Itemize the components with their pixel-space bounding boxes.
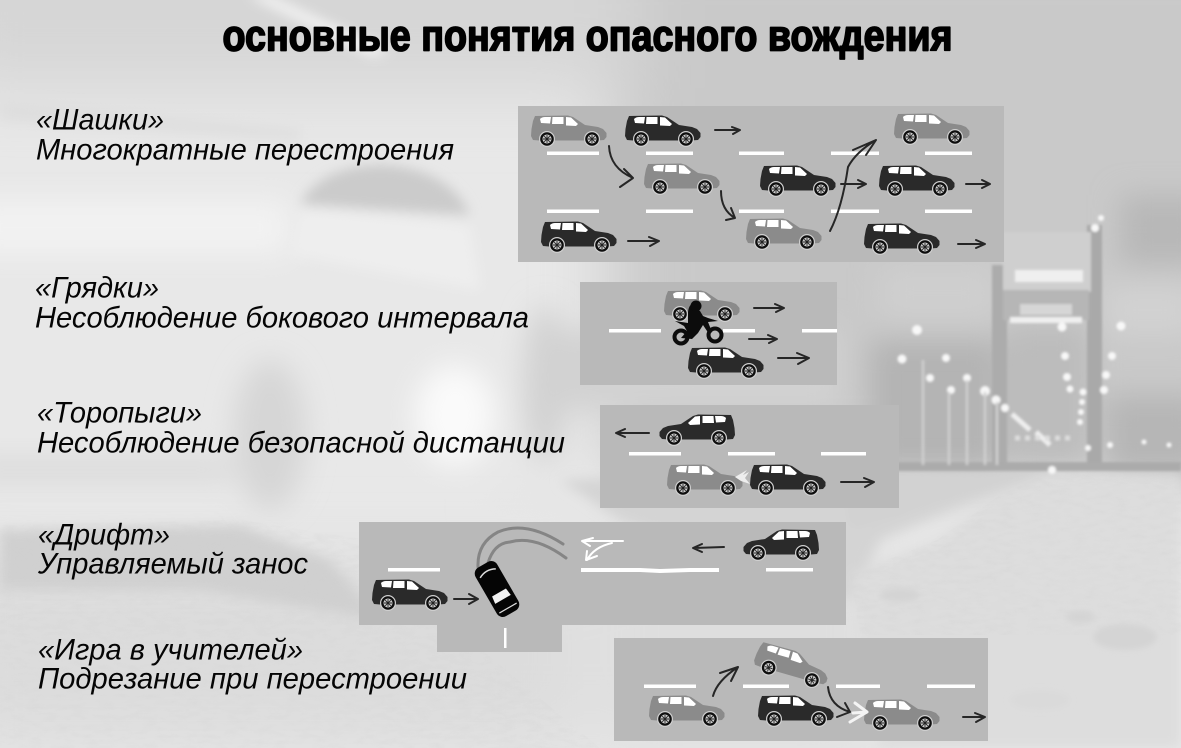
label: Грядки: Несоблюдение бокового интервала [35,302,529,334]
panel: Дрифт road diagram [359,522,846,652]
label: Игра в учителей [38,634,467,696]
panel: Шашки road diagram [518,106,1004,262]
label: Дрифт [37,518,308,580]
panel: Игра в учителей road diagram [614,638,988,741]
icon: impact spark [850,703,867,722]
label: Дрифт: Управляемый занос [37,548,308,580]
label: Торопыги [37,396,565,460]
icon: drifting sedan [472,559,522,619]
label: Шашки [36,104,454,166]
label: Торопыги: Несоблюдение безопасной дистанции [37,426,565,460]
label: Грядки [35,272,529,334]
label: Шашки: Многократные перестроения [36,134,454,166]
skid marks [478,528,566,567]
icon: white direction arrows [582,538,623,560]
icon: motorcycle [674,300,722,344]
label: Игра в учителей: Подрезание при перестроении [38,662,467,696]
label: Дрифт: «Дрифт» [38,518,170,552]
panel: Торопыги road diagram [600,405,899,508]
label: Грядки: «Грядки» [35,272,159,304]
lower right soil blotches [880,588,1157,710]
label: Шашки: «Шашки» [36,104,164,136]
label: Торопыги: «Торопыги» [37,396,202,430]
title: основные понятия опасного вождения [222,12,952,60]
icon: collision spark [735,470,750,484]
tower and street lights [880,215,1181,474]
label: Игра в учителей: «Игра в учителей» [38,634,303,666]
panel: Грядки road diagram [580,282,837,385]
